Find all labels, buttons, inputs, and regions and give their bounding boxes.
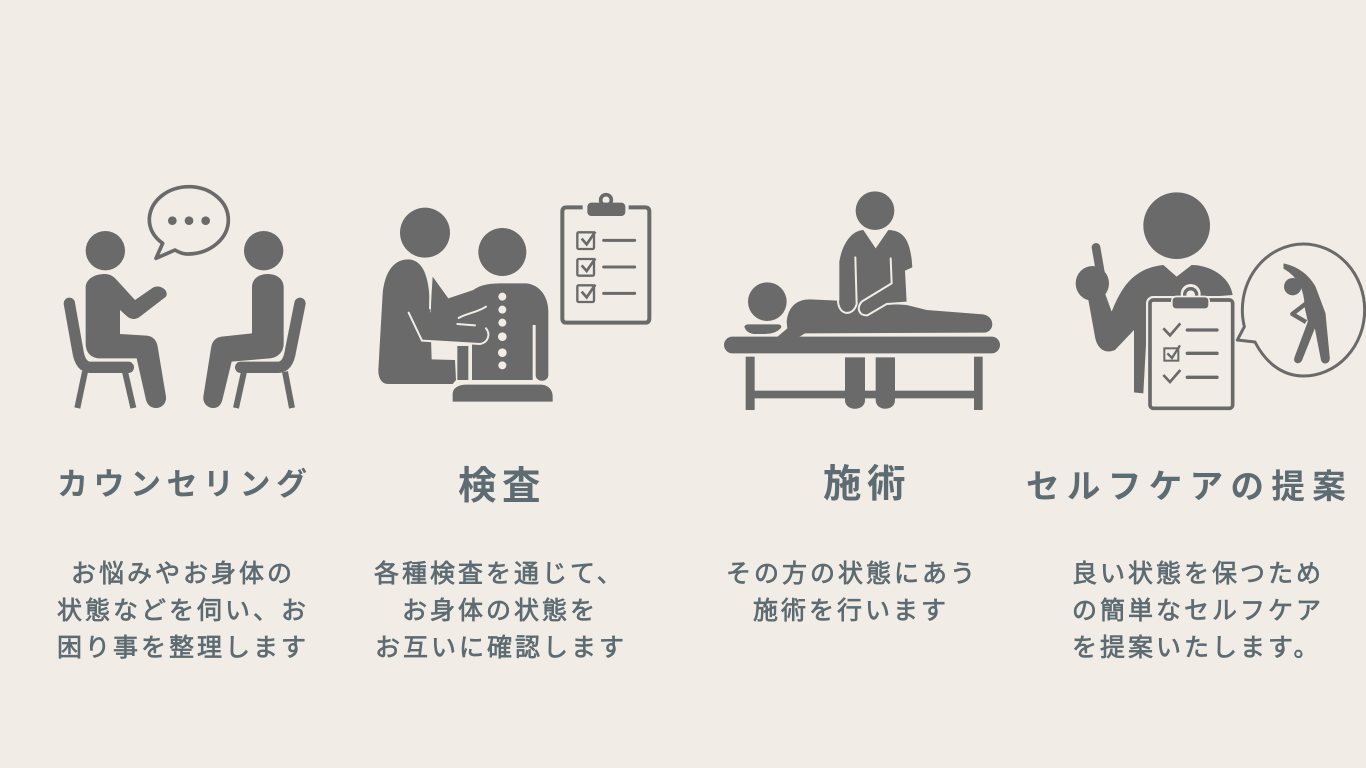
icon: examiner	[378, 208, 456, 384]
text block: counseling	[57, 560, 309, 662]
icon: stretching speech bubble	[1237, 244, 1365, 376]
icon: patient	[744, 282, 992, 339]
text block: counseling: 困り事を整理します	[57, 634, 309, 662]
text block: self care: を提案いたします。	[1072, 634, 1322, 662]
text block: examination	[374, 560, 627, 662]
icon: therapist	[838, 191, 912, 315]
icon: examination	[378, 195, 649, 402]
text block: self care: の簡単なセルフケア	[1072, 597, 1324, 625]
heading: self care: セルフケアの提案	[1026, 469, 1353, 506]
icon: examiner arm	[409, 277, 488, 344]
icon: instructor	[1076, 192, 1233, 393]
text block: treatment: 施術を行います	[753, 597, 949, 625]
icon: self care	[1076, 192, 1365, 408]
icon: speech bubble	[149, 187, 228, 258]
text block: treatment: その方の状態にあう	[726, 560, 978, 588]
icon: treatment	[724, 191, 1000, 410]
icon: left person	[69, 231, 167, 408]
text block: examination: 各種検査を通じて、	[374, 560, 625, 588]
text block: counseling: 状態などを伺い、お	[57, 597, 309, 625]
text block: treatment	[726, 560, 978, 625]
text block: examination: お身体の状態を	[402, 597, 598, 625]
heading: counseling: カウンセリング	[57, 467, 312, 502]
icon: clipboard with checklist	[562, 195, 649, 323]
text block: self care	[1072, 560, 1324, 662]
text block: counseling: お悩みやお身体の	[71, 560, 295, 588]
text block: self care: 良い状態を保つため	[1072, 560, 1324, 588]
heading: treatment: 施術	[823, 463, 911, 506]
icon: patient back	[431, 228, 553, 402]
icon: table	[724, 337, 1000, 410]
icon: right person	[203, 231, 300, 408]
icon: clipboard	[1150, 284, 1233, 408]
icon: counseling	[69, 187, 300, 408]
heading: examination: 検査	[458, 465, 546, 508]
text block: examination: お互いに確認します	[375, 634, 627, 662]
